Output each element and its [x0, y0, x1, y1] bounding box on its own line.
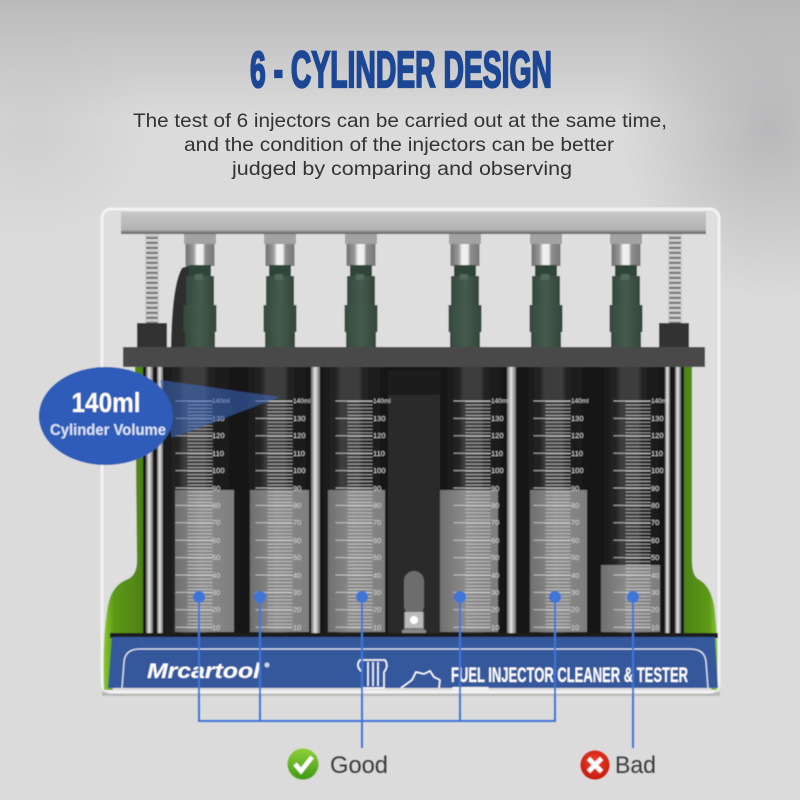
good label: Good — [330, 752, 388, 779]
scale numbers: 70 — [373, 518, 381, 527]
scale numbers: 60 — [373, 536, 381, 545]
scale numbers: 100 — [373, 466, 386, 475]
cylinder 1 glass — [163, 367, 234, 635]
panel: product photo — [39, 209, 720, 780]
scale numbers: 80 — [571, 501, 579, 510]
scale numbers: 60 — [571, 536, 579, 545]
connector lines — [199, 597, 633, 748]
left nut — [137, 323, 167, 347]
scale numbers: 130 — [571, 414, 584, 423]
scale numbers: 100 — [212, 466, 225, 475]
scale numbers: 10 — [293, 623, 301, 632]
scale numbers: 70 — [651, 518, 659, 527]
injector 4 — [448, 234, 482, 347]
callout pointer beam — [160, 380, 280, 438]
injector 3 — [344, 234, 378, 347]
scale numbers: 70 — [571, 518, 579, 527]
green side right — [683, 367, 718, 690]
blue base — [108, 633, 718, 690]
cylinder 2 glass — [247, 367, 311, 635]
left threaded rod — [146, 234, 158, 323]
scale numbers: 30 — [373, 588, 381, 597]
scale numbers: 140ml — [491, 398, 509, 405]
base inner outline — [122, 649, 708, 688]
description text: The test of 6 injectors can be carried out at the same time, — [133, 110, 667, 132]
drain valve — [402, 571, 426, 634]
callout: 140ml cylinder volume — [39, 367, 280, 465]
scale numbers: 10 — [571, 623, 579, 632]
filter icon — [358, 660, 387, 688]
scale numbers: 30 — [491, 588, 499, 597]
base bump — [452, 687, 489, 690]
cylinder 6 glass — [603, 367, 663, 635]
scale numbers: 120 — [651, 431, 664, 440]
scale numbers: 60 — [212, 536, 220, 545]
scale numbers: 40 — [571, 571, 579, 580]
scale numbers: 90 — [212, 484, 220, 493]
scale numbers: 20 — [293, 605, 301, 614]
injector 5 — [530, 234, 562, 347]
icon: bad cross — [580, 750, 610, 780]
scale numbers: 70 — [212, 518, 220, 527]
scale numbers: 120 — [491, 431, 504, 440]
scale numbers: 100 — [293, 466, 306, 475]
scale numbers: 80 — [651, 501, 659, 510]
scale numbers: 140ml — [212, 398, 230, 405]
scale numbers: 120 — [373, 431, 386, 440]
callout label: Cylinder Volume — [50, 422, 166, 439]
right threaded rod — [669, 234, 681, 323]
cylinder 4 glass — [446, 367, 505, 635]
bad label: Bad — [615, 752, 656, 779]
scale numbers: 80 — [491, 501, 499, 510]
scale numbers: 10 — [373, 623, 381, 632]
middle plate — [123, 347, 705, 367]
scale numbers: 20 — [491, 605, 499, 614]
scale numbers: 90 — [491, 484, 499, 493]
scale numbers: 50 — [293, 553, 301, 562]
scale numbers: 40 — [293, 571, 301, 580]
scale numbers: 20 — [651, 605, 659, 614]
scale numbers: 90 — [293, 484, 301, 493]
scale numbers: 30 — [651, 588, 659, 597]
scale numbers: 70 — [491, 518, 499, 527]
scale numbers: 30 — [571, 588, 579, 597]
scale numbers: 70 — [293, 518, 301, 527]
scale numbers — [212, 398, 669, 632]
scale numbers: 60 — [491, 536, 499, 545]
scale numbers: 140ml — [293, 398, 311, 405]
scale numbers: 50 — [212, 553, 220, 562]
scale numbers: 40 — [491, 571, 499, 580]
scale numbers: 90 — [571, 484, 579, 493]
scale numbers: 120 — [571, 431, 584, 440]
right nut — [659, 323, 689, 347]
scale numbers: 60 — [651, 536, 659, 545]
brand logo: Mrcartool — [147, 660, 261, 683]
description text: judged by comparing and observing — [231, 158, 572, 180]
scale numbers: 10 — [212, 623, 220, 632]
scale numbers: 140ml — [571, 398, 589, 405]
injector 1 — [184, 234, 216, 347]
scale numbers: 10 — [491, 623, 499, 632]
steel pillars — [146, 367, 681, 635]
scale numbers: 50 — [491, 553, 499, 562]
cylinder 3 glass — [322, 367, 385, 635]
scale numbers: 80 — [212, 501, 220, 510]
dark cylinder housing — [143, 367, 684, 637]
scale numbers: 120 — [293, 431, 306, 440]
scale numbers: 80 — [293, 501, 301, 510]
scale numbers: 130 — [651, 414, 664, 423]
scale numbers: 30 — [212, 588, 220, 597]
scale numbers: 100 — [571, 466, 584, 475]
scale numbers: 60 — [293, 536, 301, 545]
scale numbers: 50 — [373, 553, 381, 562]
scale numbers: 110 — [212, 449, 224, 458]
scale numbers: 20 — [373, 605, 381, 614]
title: 6 - CYLINDER DESIGN — [250, 41, 552, 98]
cylinder 5 glass — [527, 367, 587, 635]
scale numbers: 110 — [373, 449, 385, 458]
scale numbers: 20 — [212, 605, 220, 614]
scale numbers: 90 — [373, 484, 381, 493]
scale numbers: 110 — [571, 449, 583, 458]
scale numbers: 130 — [373, 414, 386, 423]
scale numbers: 10 — [651, 623, 659, 632]
engine icon — [401, 671, 440, 688]
scale numbers: 130 — [212, 414, 225, 423]
scale numbers: 40 — [651, 571, 659, 580]
icon: good check — [288, 748, 318, 780]
description text — [133, 110, 667, 180]
scale numbers: 50 — [651, 553, 659, 562]
callout value: 140ml — [72, 387, 140, 418]
scale numbers: 100 — [491, 466, 504, 475]
injector 6 — [610, 234, 642, 347]
scale numbers: 130 — [293, 414, 306, 423]
scale numbers: 110 — [491, 449, 503, 458]
graduated scales — [194, 400, 638, 628]
callout oval — [39, 367, 173, 465]
green side left — [104, 367, 144, 690]
black hose — [171, 265, 190, 347]
scale numbers: 90 — [651, 484, 659, 493]
description text: and the condition of the injectors can be better — [184, 134, 615, 156]
injector 2 — [264, 234, 296, 347]
scale numbers: 20 — [571, 605, 579, 614]
scale numbers: 40 — [373, 571, 381, 580]
scale numbers: 100 — [651, 466, 664, 475]
scale numbers: 140ml — [373, 398, 391, 405]
scale numbers: 80 — [373, 501, 381, 510]
scale numbers: 30 — [293, 588, 301, 597]
scale numbers: 120 — [212, 431, 225, 440]
scale numbers: 110 — [651, 449, 663, 458]
top plate — [121, 212, 706, 234]
scale numbers: 50 — [571, 553, 579, 562]
marker dots — [193, 591, 639, 603]
registered mark — [264, 662, 270, 668]
scale numbers: 40 — [212, 571, 220, 580]
scale numbers: 140ml — [651, 398, 669, 405]
liquid levels — [175, 490, 660, 632]
center panel — [388, 370, 440, 635]
scale numbers: 130 — [491, 414, 504, 423]
scale numbers: 110 — [293, 449, 305, 458]
